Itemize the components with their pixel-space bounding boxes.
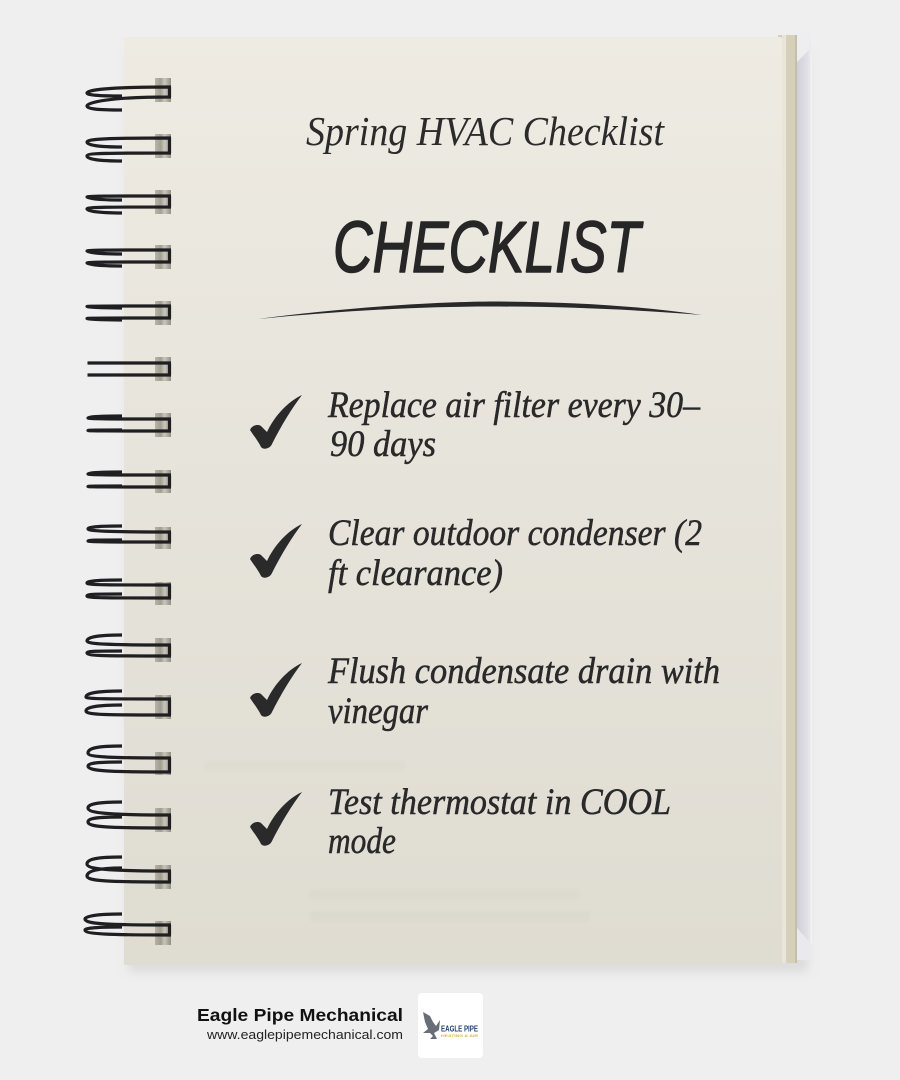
coil 6: [88, 357, 171, 381]
coil 4: [87, 245, 171, 269]
icon: eagle: [423, 1012, 440, 1039]
coil 13: [88, 746, 171, 775]
heading: CHECKLIST: [333, 208, 644, 288]
coil 1: [87, 78, 171, 110]
coil 16: [85, 914, 171, 945]
coil 14: [88, 802, 171, 832]
page stack edge: [778, 35, 797, 963]
item 2 text: ft clearance): [328, 553, 503, 594]
checklist item 2: [250, 513, 702, 594]
logo tagline: HEATING & AIR: [441, 1033, 478, 1038]
checklist item 1: [250, 385, 700, 465]
coil 5: [87, 301, 171, 325]
coil 11: [87, 635, 171, 662]
subtitle: Spring HVAC Checklist: [306, 108, 665, 154]
item 3 text: vinegar: [328, 691, 429, 732]
item 1 text: Replace air filter every 30–: [327, 385, 700, 426]
item 1 text: 90 days: [330, 424, 436, 465]
item 2 text: Clear outdoor condenser (2: [328, 513, 702, 554]
spiral binding: [85, 78, 171, 945]
coil 10: [87, 580, 171, 605]
logo wordmark: EAGLE PIPE: [441, 1024, 479, 1034]
item 4 text: Test thermostat in COOL: [328, 782, 671, 823]
coil 12: [86, 691, 171, 719]
notebook back cover: [795, 33, 812, 960]
icon: check mark 1: [250, 395, 302, 449]
heading underline: [258, 302, 702, 319]
icon: check mark 4: [250, 792, 302, 846]
item 4 text: mode: [328, 821, 396, 862]
company name: Eagle Pipe Mechanical: [197, 1005, 403, 1025]
show-through text on page: [205, 762, 590, 921]
coil 15: [87, 857, 171, 889]
coil 2: [87, 134, 171, 161]
coil 9: [88, 526, 171, 549]
checklist item 3: [250, 651, 720, 732]
icon: check mark 3: [250, 663, 302, 717]
logo: [418, 993, 483, 1058]
coil 8: [88, 470, 171, 493]
icon: check mark 2: [250, 524, 302, 578]
notebook page: [124, 37, 782, 965]
coil 3: [87, 190, 171, 214]
notebook shadow: [128, 52, 808, 972]
item 3 text: Flush condensate drain with: [327, 651, 720, 692]
checklist item 4: [250, 782, 671, 862]
coil 7: [88, 413, 171, 437]
website url: www.eaglepipemechanical.com: [206, 1027, 403, 1042]
